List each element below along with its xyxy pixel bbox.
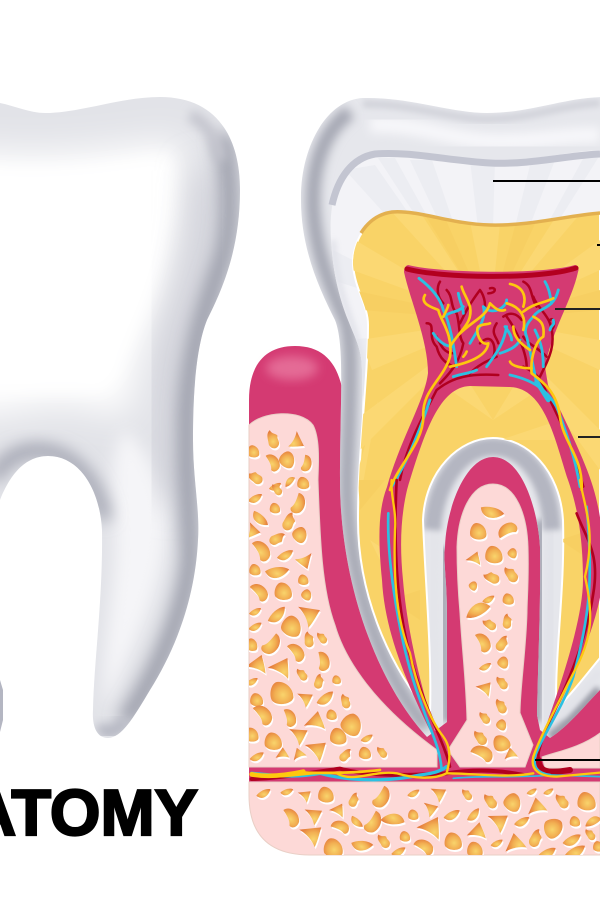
enamel and cementum layer [295, 90, 600, 750]
yellow root nerves [252, 480, 600, 778]
yellow nerves [390, 284, 582, 490]
left whole tooth illustration [0, 90, 250, 750]
grey-blue dentin band [332, 153, 600, 205]
gum highlight [266, 356, 318, 380]
leader line: apical foramen [535, 759, 600, 761]
cyan root nerves [252, 507, 600, 780]
dentin band and white dentine [328, 150, 600, 414]
left tooth sliver at edge [0, 680, 3, 732]
cyan nerves [392, 278, 580, 487]
leader line: pulp [555, 308, 600, 310]
bone pores [241, 430, 600, 859]
leader line: enamel [493, 180, 600, 182]
yellow dentin with rays [352, 210, 600, 715]
red root vessels [252, 480, 595, 779]
dental pulp [379, 265, 600, 750]
leader line: canal [578, 436, 600, 438]
nerves and vessels in pulp chamber [390, 278, 583, 490]
red vessels [400, 282, 583, 487]
bone tissue [241, 414, 600, 859]
gum and periodontal tissue [249, 346, 600, 782]
dentin top edge [361, 212, 600, 233]
leader line: dentin [597, 244, 600, 246]
nerves and vessels in root canals and channel [252, 480, 600, 780]
pulp top edge [407, 268, 576, 276]
